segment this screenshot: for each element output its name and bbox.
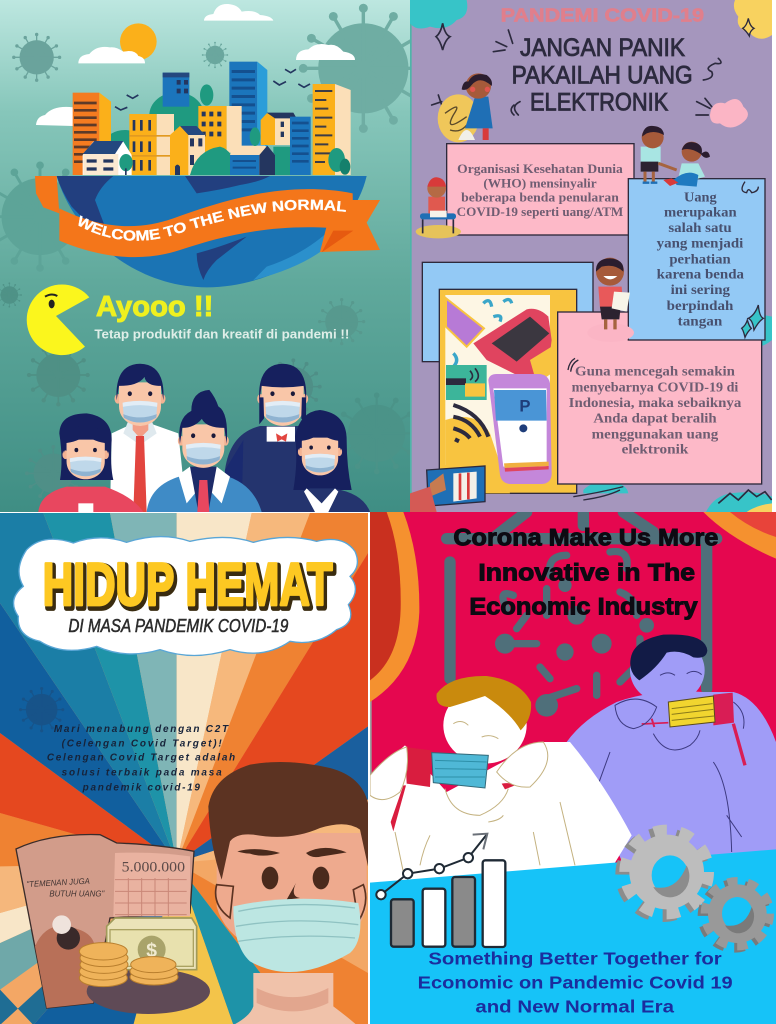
decorative arcs [370, 512, 776, 702]
title: jangan panik: JANGAN PANIK [520, 35, 686, 62]
illustration: plate, bills and coins [79, 918, 210, 1014]
title: Economic Industry [469, 593, 698, 620]
subtitle: DI MASA PANDEMIK COVID-19 [68, 615, 288, 636]
body text [47, 724, 235, 793]
birds [115, 69, 310, 110]
title: Corona Make Us More [453, 524, 718, 551]
icon: pacman [27, 284, 89, 355]
box: guna mencegah: menyebarnya COVID-19 di [572, 379, 739, 394]
box: uang: tangan [678, 313, 723, 328]
illustration: man with yellow mask [567, 634, 776, 879]
box: uang: berpindah [667, 298, 734, 313]
box: uang [628, 179, 765, 340]
box: guna mencegah: Anda dapat beralih [593, 410, 717, 425]
box: uang: yang menjadi [657, 235, 744, 250]
body text: Mari menabung dengan C2T [54, 724, 229, 735]
illustration: girl with bag [438, 73, 493, 142]
box: who [447, 144, 634, 235]
illustration: child at desk [416, 177, 461, 238]
people in masks [38, 364, 370, 512]
panel: hidup hemat [0, 513, 368, 1024]
cyan band [370, 849, 776, 1024]
savings grid [115, 878, 187, 916]
box: guna mencegah: Guna mencegah semakin [575, 363, 736, 378]
title: pandemi covid-19: PANDEMI COVID-19 [501, 5, 704, 26]
amount: 5.000.000 [122, 860, 185, 876]
title [453, 524, 718, 620]
cloud title background [14, 537, 357, 655]
body text: Celengan Covid Target adalah [47, 753, 235, 764]
sparkles [742, 305, 763, 337]
ribbon banner [35, 176, 380, 258]
illustration: plate, bills and coins: $ [146, 940, 157, 961]
ribbon text: WELCOME TO THE NEW NORMAL [78, 200, 346, 241]
box: uang: merupakan [664, 205, 737, 220]
illustration: man with mask [208, 762, 368, 1024]
subheading: Tetap produktif dan kreatif di pandemi !! [94, 327, 349, 342]
sun [120, 23, 157, 60]
globe [57, 176, 367, 287]
box: uang: perhatian [669, 251, 731, 266]
box: e-money collage: P [519, 397, 531, 416]
virus background pattern [0, 8, 424, 500]
title fill: hidup hemat: HIDUP HEMAT [43, 550, 333, 618]
box: uang: salah satu [668, 220, 732, 235]
illustration: piggy bank book [16, 835, 194, 1008]
city on globe [73, 62, 351, 175]
box: back blue [422, 262, 593, 362]
box: guna mencegah: menggunakan uang [592, 426, 719, 441]
label: "TEMENAN JUGA [26, 876, 90, 889]
box: who: beberapa benda penularan [461, 191, 619, 205]
decorative blobs [410, 0, 772, 512]
illustration: children on box [641, 126, 710, 187]
box: who: COVID-19 seperti uang/ATM [457, 205, 624, 219]
tagline: Something Better Together for [428, 949, 722, 969]
panel: corona make us more innovative [370, 512, 776, 1024]
icon: small gear [704, 883, 768, 947]
tagline [418, 949, 733, 1017]
box: who: Organisasi Kesehatan Dunia [457, 162, 623, 176]
title: elektronik: ELEKTRONIK [530, 90, 669, 117]
body text: pandemik covid-19 [82, 782, 200, 793]
panel: pandemi covid-19 uang elektronik [410, 0, 772, 512]
icon: large gear [623, 833, 706, 914]
body text: solusi terbaik pada masa [62, 767, 222, 778]
title shadow: hidup hemat: HIDUP HEMAT [45, 552, 335, 620]
box: uang: Uang [684, 189, 717, 204]
clouds [36, 4, 355, 126]
illustration: man with blue mask [370, 676, 632, 884]
panel: welcome to the new normal [0, 0, 410, 512]
hand-drawn accents [432, 30, 721, 115]
illustration: child with paper [596, 258, 634, 339]
title: pakailah uang: PAKAILAH UANG [512, 62, 693, 89]
icon: outline virus [21, 689, 63, 731]
box: guna mencegah [558, 312, 762, 484]
box: guna mencegah: Indonesia, maka sebaiknya [569, 395, 742, 410]
tagline: Economic on Pandemic Covid 19 [418, 973, 733, 993]
sunburst rays [0, 513, 368, 1024]
body text: (Celengan Covid Target)! [62, 738, 222, 749]
box: who: (WHO) mensinyalir [483, 176, 597, 190]
box: guna mencegah: elektronik [622, 442, 689, 457]
gray virus motif [447, 512, 717, 717]
bar chart with trend arrow [376, 834, 505, 947]
box: uang: ini sering [671, 282, 730, 297]
illustration: book and hand [410, 466, 623, 512]
label: BUTUH UANG" [49, 888, 105, 898]
box: e-money collage [439, 289, 577, 493]
tagline: and New Normal Era [475, 997, 675, 1017]
title: Innovative in The [478, 559, 695, 586]
heading: Ayooo: Ayooo !! [96, 291, 213, 323]
box: uang: karena benda [657, 267, 744, 282]
